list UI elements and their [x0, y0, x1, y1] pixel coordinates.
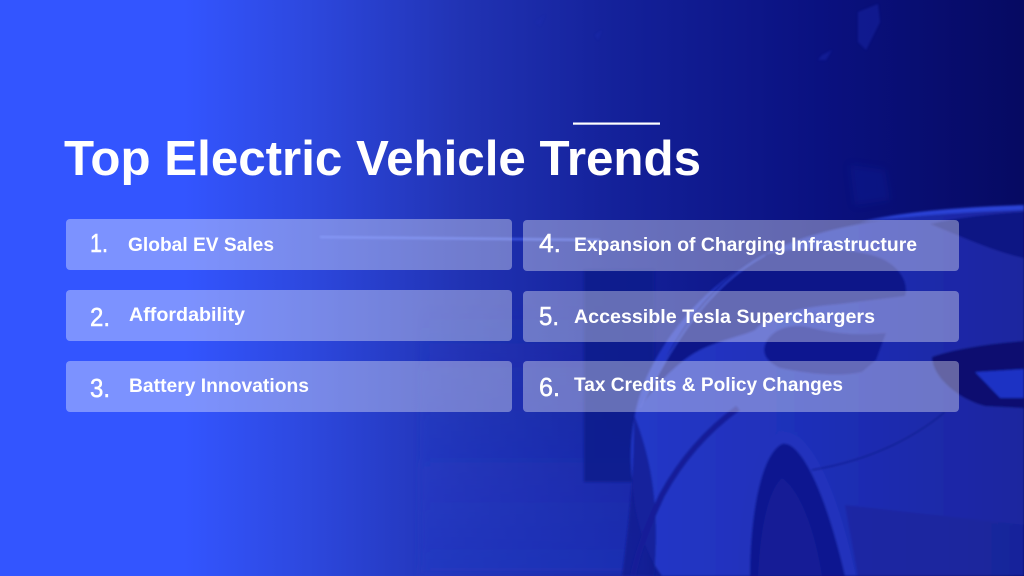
- body crease line: [812, 412, 945, 470]
- label: Affordability: Affordability: [129, 304, 245, 326]
- panel: item 5: [523, 291, 959, 342]
- background: trees and charger wall: [420, 4, 890, 576]
- light streak: [320, 236, 600, 241]
- wheel arch: [738, 432, 856, 576]
- label: Expansion of Charging Infrastructure: Expansion of Charging Infrastructure: [574, 234, 917, 256]
- panel: item 6: [523, 361, 959, 412]
- number 5: 5.: [539, 301, 559, 331]
- label: Accessible Tesla Superchargers: Accessible Tesla Superchargers: [574, 306, 875, 328]
- panel: item 2: [66, 290, 512, 341]
- number 1: 1.: [90, 228, 108, 258]
- wheel and tyre: [750, 444, 845, 576]
- label: Battery Innovations: Battery Innovations: [129, 375, 309, 397]
- panel: item 1: [66, 219, 512, 270]
- charging cable: [633, 408, 738, 576]
- label: Tax Credits & Policy Changes: Tax Credits & Policy Changes: [574, 374, 843, 396]
- panel: item 3: [66, 361, 512, 412]
- number 4: 4.: [539, 228, 561, 258]
- number 3: 3.: [90, 373, 110, 403]
- hood highlight: [860, 205, 1024, 222]
- upper dark cavity: [640, 248, 906, 408]
- windshield dark region: [930, 212, 1024, 258]
- charge port: [764, 326, 886, 375]
- panel: item 4: [523, 220, 959, 271]
- reflection line: [640, 255, 765, 408]
- electric car: [622, 205, 1024, 576]
- number 6: 6.: [539, 372, 560, 402]
- front tyre: [622, 415, 656, 576]
- car body: [631, 208, 1024, 576]
- label: Global EV Sales: Global EV Sales: [128, 234, 274, 256]
- number 2: 2.: [90, 302, 110, 332]
- accent line: [573, 122, 660, 125]
- title: Top Electric Vehicle Trends: [64, 132, 701, 186]
- lower sill shade: [845, 505, 1024, 576]
- headlight: [932, 341, 1024, 408]
